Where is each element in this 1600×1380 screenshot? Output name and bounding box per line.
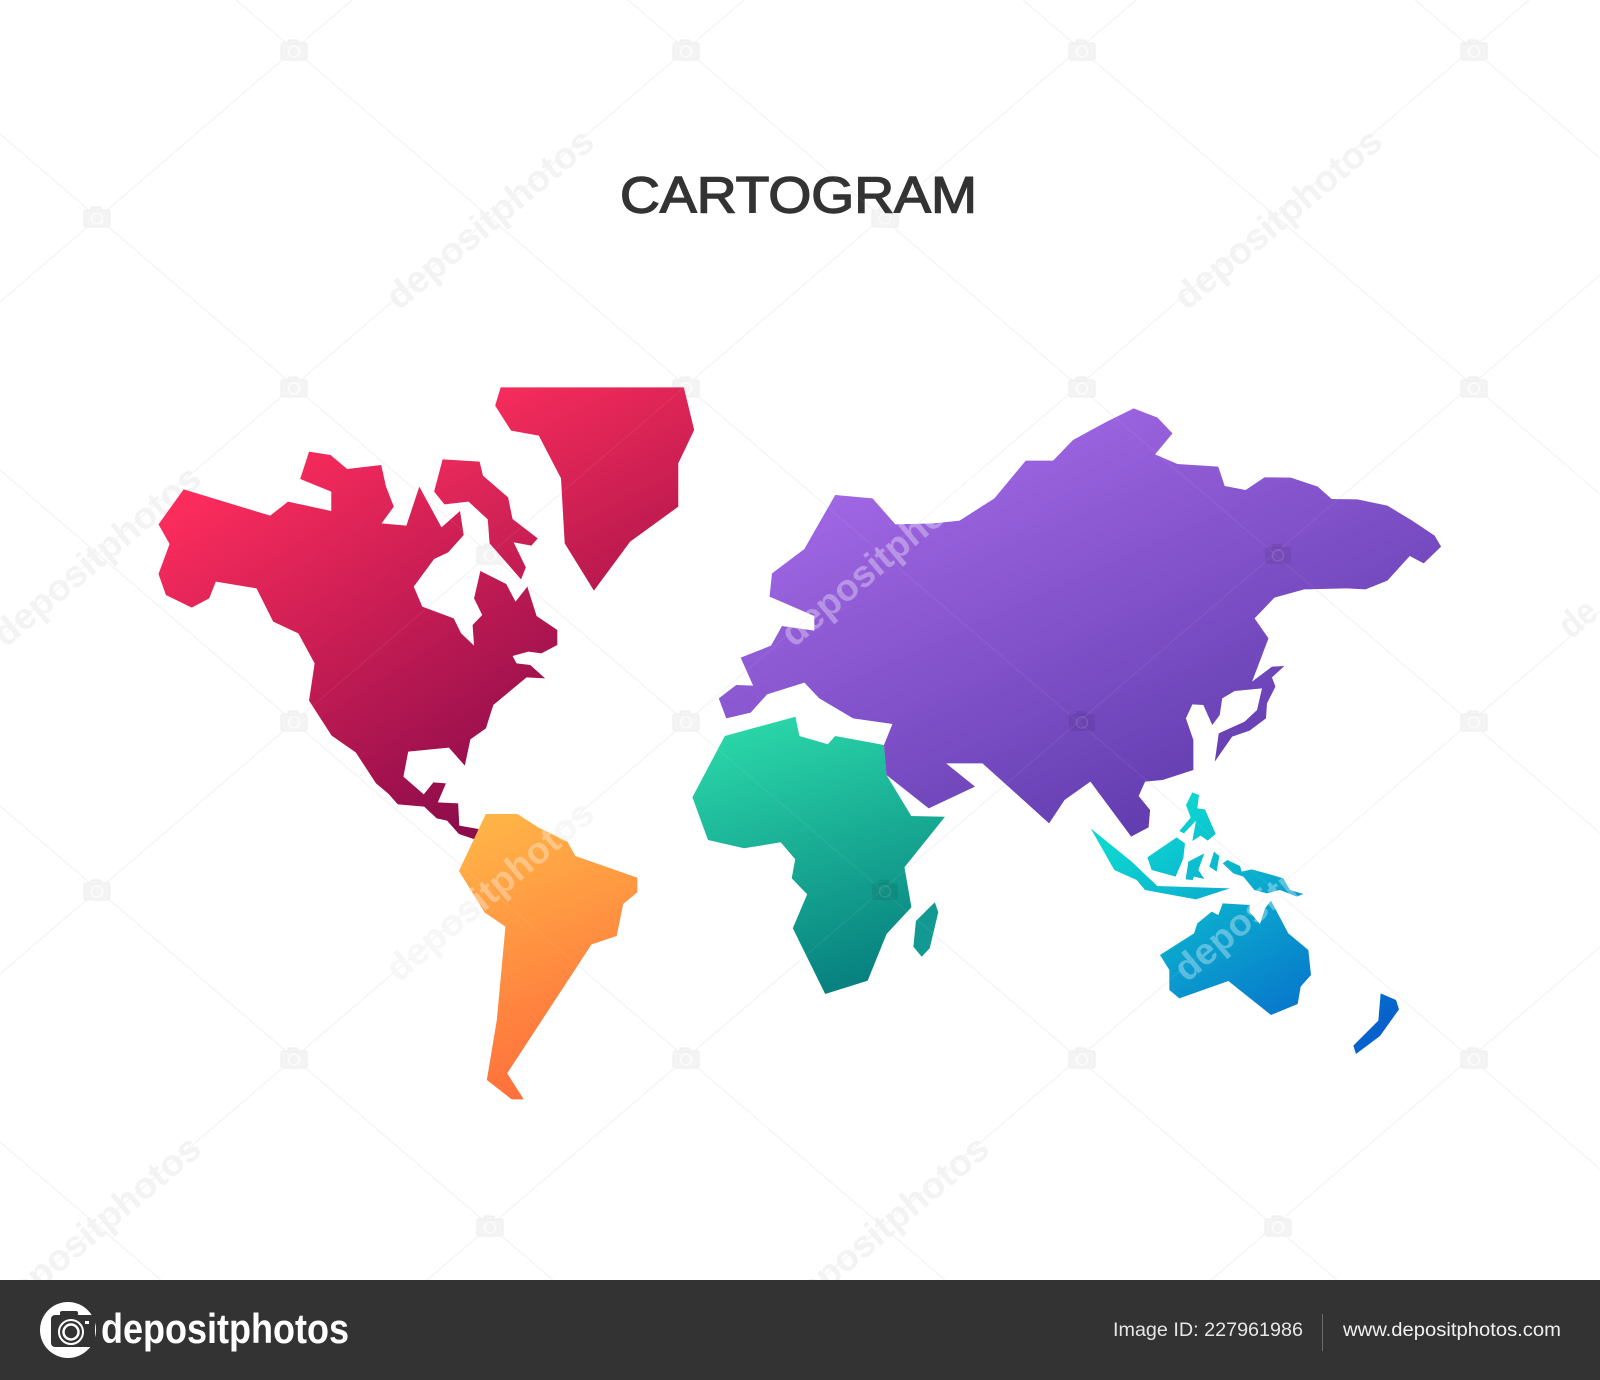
watermark background layer: depositphotos [378,792,602,989]
watermark overlay on continents: depositphotos [378,792,602,989]
continent: North America [158,452,557,839]
continent: Australia [1160,901,1311,1015]
continent: Oceania and Southeast Asia islands [1091,792,1399,1054]
footer bar [0,1280,1600,1380]
title: CARTOGRAM [620,166,977,224]
island: Madagascar [913,902,938,957]
island: Moluccas [1209,852,1219,872]
island: Sulawesi [1186,853,1204,880]
island: Philippines [1179,792,1216,841]
island: Sumatra and Java [1091,828,1230,899]
map: continents [158,387,1441,1099]
watermark overlay on continents: depositphotos [773,457,997,654]
watermark background layer: depositphotos [1166,120,1390,317]
continent: Asia and Europe [719,408,1441,837]
continent: Africa [692,717,945,994]
island: New Guinea [1223,860,1303,897]
watermark background layer: depositphotos [773,1127,997,1324]
image id: Image ID: 227961986 [1113,1319,1303,1341]
watermark background layer: depositphotos [378,120,602,317]
continent: Greenland [495,387,694,591]
watermark overlay on continents: depositphotos [1166,792,1390,989]
icon: camera logo [40,1302,96,1358]
island: New Zealand [1353,993,1399,1054]
website url: www.depositphotos.com [1342,1319,1561,1341]
continent: South America [459,814,637,1099]
divider [1322,1314,1323,1351]
island: Borneo [1147,837,1185,877]
logo wordmark: depositphotos [101,1305,349,1352]
